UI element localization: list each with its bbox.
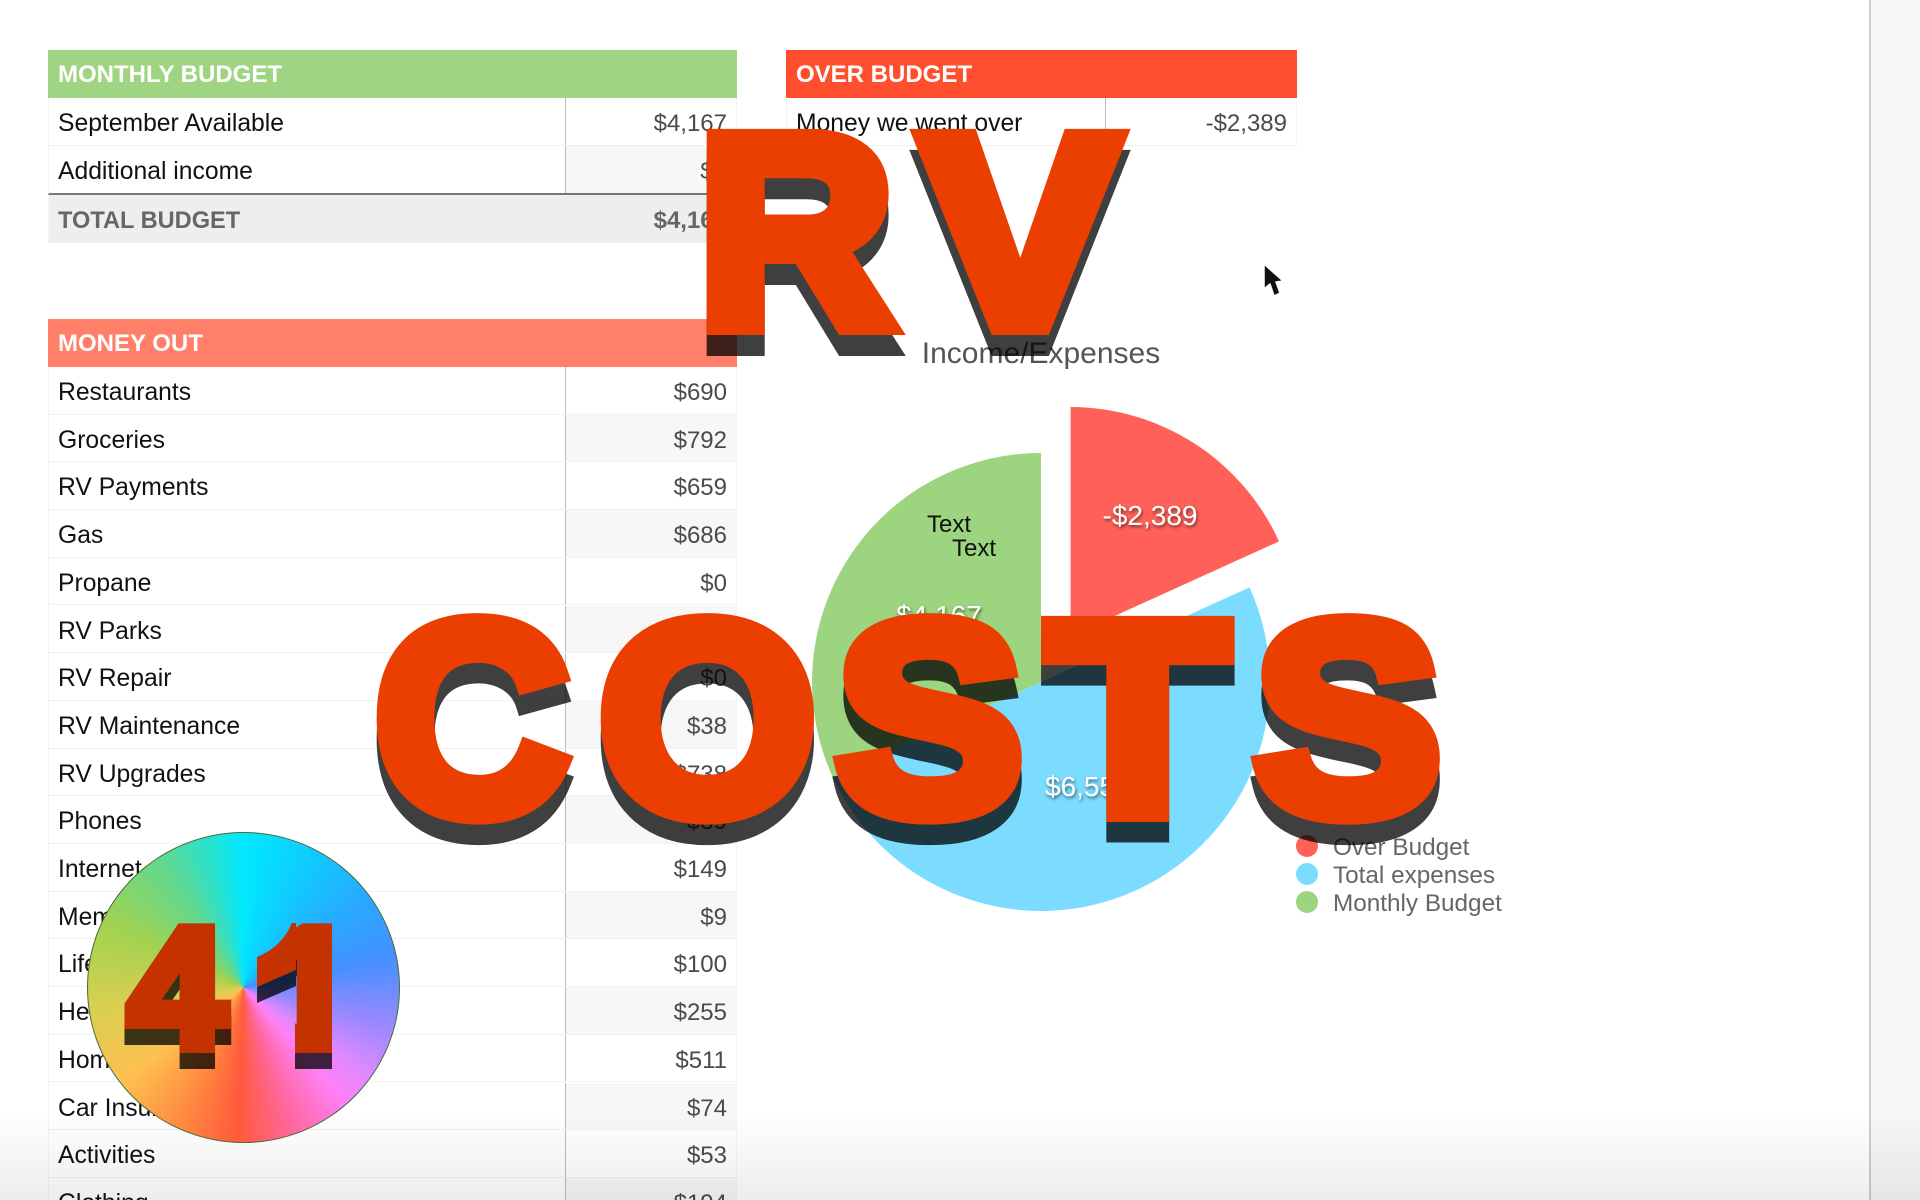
row: gas: $686 [674, 522, 727, 549]
row: additional income [48, 146, 737, 195]
row: health insurance: Health Insurance [58, 999, 245, 1026]
row: activities: Activities [58, 1142, 155, 1169]
row: total budget: TOTAL BUDGET [58, 208, 240, 234]
label: placeholder text line two: Text [952, 535, 996, 562]
number shadow [124, 940, 332, 1069]
row: life insurance [48, 939, 737, 987]
row: RV maintenance: RV Maintenance [58, 713, 240, 740]
number face: 1 [263, 893, 358, 1084]
row: RV maintenance [48, 701, 737, 749]
row: life insurance: $100 [674, 951, 727, 978]
pie slice: total expenses [832, 587, 1270, 911]
row: September available [48, 98, 737, 146]
legend dot: total expenses [1296, 863, 1318, 885]
label: over budget value: -$2,389 [1103, 500, 1197, 531]
panel: monthly budget table [48, 50, 737, 243]
row: activities: $53 [687, 1142, 727, 1169]
row: activities [48, 1130, 737, 1178]
number shadow: 4 [128, 909, 226, 1100]
row: RV payments: RV Payments [58, 474, 208, 501]
row: phones [48, 796, 737, 844]
legend label: total expenses: Total expenses [1333, 862, 1495, 889]
row: RV upgrades: $738 [674, 761, 727, 788]
row: home: $511 [675, 1047, 727, 1074]
title: RV: V [922, 80, 1119, 384]
title: COSTS: O [599, 566, 816, 870]
row: RV upgrades: RV Upgrades [58, 761, 206, 788]
row: memberships: $9 [700, 904, 727, 931]
title shadow: COSTS: S [1254, 587, 1441, 891]
row: total budget: $4,167 [654, 207, 727, 234]
row: car insurance [48, 1082, 737, 1130]
heading: monthly budget [48, 50, 737, 98]
title: COSTS: T [1048, 566, 1228, 870]
number face: 4 [128, 893, 226, 1084]
heading: money out: MONEY OUT [58, 330, 203, 357]
row: home: Home [58, 1047, 124, 1074]
title shadow: COSTS: S [836, 587, 1023, 891]
chart title: Income/Expenses [922, 337, 1160, 370]
row: health insurance [48, 987, 737, 1035]
row: RV payments: $659 [674, 474, 727, 501]
row: car insurance: Car Insurance [58, 1094, 213, 1122]
number face [124, 923, 332, 1053]
row: car insurance: $74 [687, 1094, 727, 1122]
legend dot: monthly budget [1296, 891, 1318, 913]
row: propane: Propane [58, 570, 151, 597]
title: COSTS [375, 566, 1441, 870]
heading: monthly budget: MONTHLY BUDGET [58, 61, 282, 88]
row: total budget [48, 195, 737, 243]
legend [1296, 834, 1502, 917]
legend dot: over budget [1296, 835, 1318, 857]
title shadow: RV [698, 100, 1119, 404]
title shadow: COSTS [375, 587, 1441, 891]
right sidebar strip [1869, 0, 1920, 1200]
row: clothing [48, 1178, 737, 1200]
title shadow: COSTS: C [375, 587, 569, 891]
row: restaurants: $690 [674, 379, 727, 406]
label: placeholder text line one: Text [927, 511, 971, 538]
row: September available: $4,167 [654, 110, 727, 137]
row: groceries: Groceries [58, 427, 165, 454]
heading: over budget [786, 50, 1297, 98]
row: RV repair: $0 [700, 665, 727, 692]
row: life insurance: Life Insurance [58, 951, 213, 978]
label: total expenses value: $6,556 [1045, 771, 1131, 802]
icon: mouse cursor [1264, 264, 1283, 296]
pie slice: over budget [1071, 407, 1279, 636]
row: RV repair [48, 653, 737, 701]
title shadow: COSTS: T [1048, 587, 1228, 891]
row: RV parks [48, 606, 737, 653]
row: September available: September Available [58, 110, 284, 137]
row: memberships: Memberships [58, 904, 206, 931]
row: gas: Gas [58, 522, 103, 549]
row: additional income: Additional income [58, 158, 253, 185]
legend label: monthly budget: Monthly Budget [1333, 890, 1502, 917]
row: restaurants: Restaurants [58, 379, 191, 406]
number shadow: 1 [263, 909, 358, 1100]
title: COSTS: S [836, 566, 1023, 870]
row: propane [48, 558, 737, 605]
row: propane: $0 [700, 570, 727, 597]
row: RV repair: RV Repair [58, 665, 171, 692]
row: money we went over [786, 98, 1297, 146]
row: internet [48, 844, 737, 892]
bottom fade overlay [0, 1110, 1920, 1200]
title: RV [698, 80, 1119, 384]
row: groceries [48, 415, 737, 462]
title shadow: COSTS: O [599, 587, 816, 891]
row: groceries: $792 [674, 427, 727, 454]
row: internet: Internet [58, 856, 142, 883]
badge: colour wheel circle [87, 832, 400, 1143]
heading: over budget: OVER BUDGET [796, 61, 972, 88]
row: memberships [48, 892, 737, 939]
legend label: over budget: Over Budget [1333, 834, 1470, 861]
row: RV payments [48, 462, 737, 510]
label: monthly budget value: $4,167 [896, 600, 982, 631]
title shadow: RV: V [922, 100, 1119, 404]
heading: money out [48, 319, 737, 367]
panel: money out table [48, 319, 737, 1200]
row: health insurance: $255 [674, 999, 727, 1026]
title: RV: R [698, 80, 894, 384]
row: home [48, 1035, 737, 1082]
row: internet: $149 [674, 856, 727, 883]
panel: over budget table [786, 50, 1297, 146]
badge number: 41 [124, 923, 332, 1069]
row: money we went over: -$2,389 [1206, 110, 1287, 137]
title: COSTS: C [375, 566, 569, 870]
row: RV upgrades [48, 749, 737, 796]
row: RV maintenance: $38 [687, 713, 727, 740]
title shadow: RV: R [698, 100, 894, 404]
row: RV parks: RV Parks [58, 618, 162, 644]
row: phones: Phones [58, 808, 142, 835]
row: phones: $89 [687, 808, 727, 835]
row: restaurants [48, 367, 737, 415]
pie slice: monthly budget [812, 453, 1041, 777]
row: gas [48, 510, 737, 558]
title: COSTS: S [1254, 566, 1441, 870]
row: additional income: $0 [700, 158, 727, 185]
row: money we went over: Money we went over [796, 110, 1022, 137]
